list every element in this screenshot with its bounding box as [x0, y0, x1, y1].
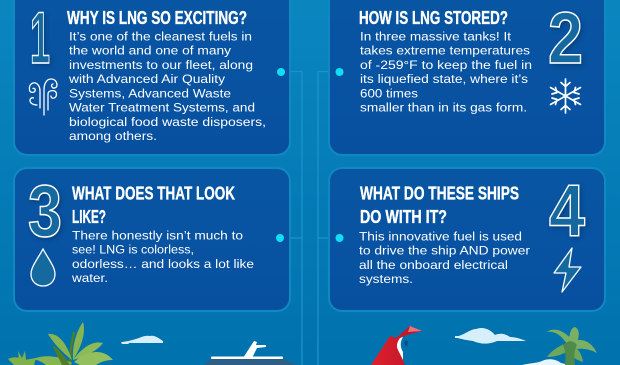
body text [359, 230, 530, 286]
body text: its liquefied state, where it’s [360, 72, 528, 86]
number 3: 3 [28, 171, 62, 252]
body text: with Advanced Air Quality [68, 72, 226, 86]
heading: WHY IS LNG SO EXCITING? [67, 8, 247, 28]
body text: the world and one of many [69, 44, 232, 58]
red funnel [371, 326, 422, 365]
body text: all the onboard electrical [359, 258, 508, 272]
heading: WHAT DOES THAT LOOK [72, 184, 235, 204]
body text: biological food waste disposers, [69, 115, 266, 129]
left cloud [121, 336, 163, 344]
panel: why is LNG so exciting: 1 [30, 0, 50, 79]
body text: Systems, Advanced Waste [69, 86, 231, 100]
panel: what do these ships do [329, 168, 605, 311]
body text: 600 times [360, 86, 418, 100]
heading: HOW IS LNG STORED? [359, 8, 508, 28]
connector lines [280, 72, 339, 365]
number 2: 2 [548, 0, 583, 79]
panel: how is LNG stored [329, 0, 605, 155]
panel: why is LNG so exciting [14, 0, 290, 155]
right palm tree [547, 327, 597, 365]
body text: water. [71, 271, 108, 285]
body text [71, 228, 254, 285]
icon: snowflake [550, 79, 580, 113]
heading: WHAT DO THESE SHIPS [360, 184, 519, 204]
ship [204, 341, 297, 365]
body text: odorless… and looks a lot like [72, 257, 254, 271]
body text: Water Treatment Systems, and [69, 101, 255, 115]
body text: It’s one of the cleanest fuels in [69, 30, 252, 44]
body text: see! LNG is colorless, [72, 243, 194, 257]
icon: steam swirls [29, 79, 57, 115]
ship hull [204, 359, 297, 365]
icon: water drop [31, 249, 55, 286]
body text: among others. [69, 129, 157, 143]
body text: investments to our fleet, along [69, 58, 253, 72]
heading: LIKE? [72, 207, 106, 227]
heading [360, 184, 519, 227]
body text: takes extreme temperatures [360, 44, 530, 58]
icon: lightning bolt [554, 248, 581, 292]
small palm [8, 351, 36, 365]
body text: In three massive tanks! It [360, 30, 512, 44]
connector dots [276, 68, 344, 242]
heading [72, 184, 235, 227]
body text: to drive the ship AND power [359, 244, 530, 258]
body text [360, 30, 532, 115]
left palm tree [8, 322, 113, 365]
body text [68, 30, 266, 143]
ship deck [211, 356, 283, 359]
right cloud [455, 328, 526, 344]
body text: smaller than in its gas form. [360, 101, 527, 115]
number 4: 4 [549, 171, 585, 252]
body text: This innovative fuel is used [359, 230, 522, 244]
body text: of -259°F to keep the fuel in [360, 58, 532, 72]
heading: DO WITH IT? [360, 207, 447, 227]
ship mast [243, 341, 266, 358]
small white clouds [522, 359, 570, 365]
body text: There honestly isn’t much to [72, 228, 243, 242]
body text: systems. [359, 272, 413, 286]
panel: what does that look like [14, 168, 290, 311]
